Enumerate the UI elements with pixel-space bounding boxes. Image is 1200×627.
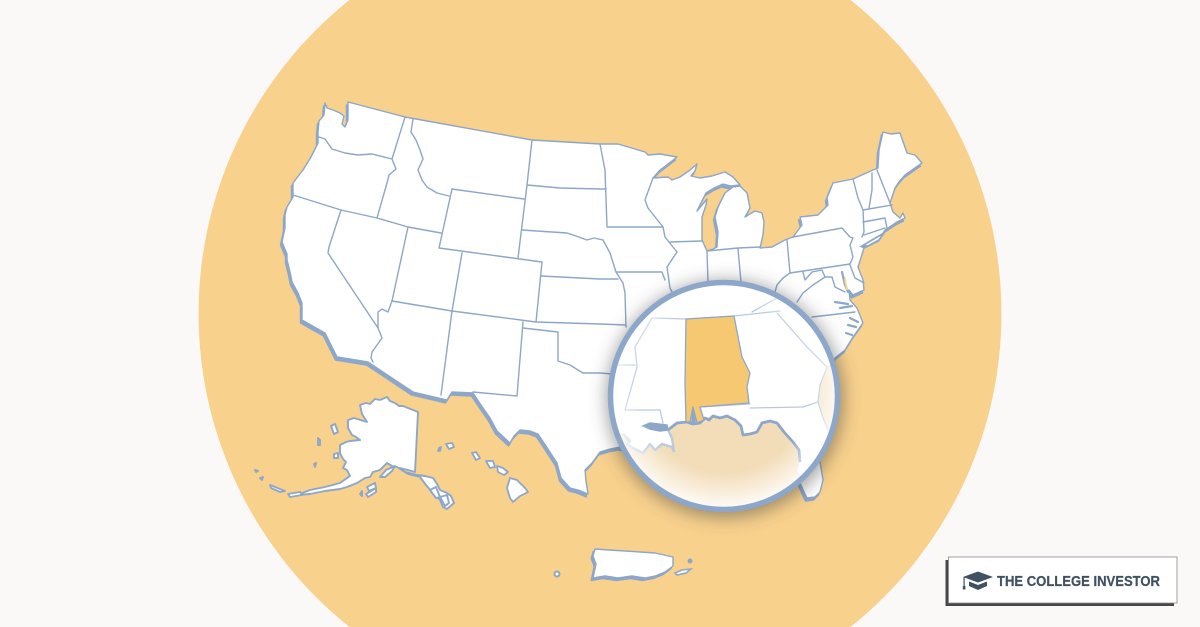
logo box shadow xyxy=(946,560,1174,606)
logo text: THE COLLEGE INVESTOR xyxy=(997,574,1160,590)
Mona Island xyxy=(554,572,560,576)
Alabama state xyxy=(685,316,750,423)
map: contiguous United States xyxy=(280,102,922,501)
Gulf of Mexico xyxy=(620,416,800,506)
gulf coast outline xyxy=(668,416,800,462)
Chesapeake Bay xyxy=(844,276,848,290)
Lake Pontchartrain xyxy=(643,423,668,431)
Puerto Rico xyxy=(554,549,692,580)
orange background circle xyxy=(199,0,1001,627)
lower 48 landmass xyxy=(282,102,922,498)
Hawaii xyxy=(438,443,528,502)
magnifier shadow xyxy=(607,281,843,517)
neighbouring state lines xyxy=(615,298,828,430)
magnifying lens: Alabama xyxy=(605,280,845,512)
Alaska xyxy=(255,397,454,509)
Long Island xyxy=(862,233,884,246)
state border lines xyxy=(293,117,892,396)
lens ring xyxy=(610,282,838,510)
Vieques and Culebra xyxy=(675,569,691,575)
logo box xyxy=(946,557,1177,606)
map shadow edge xyxy=(280,105,920,501)
logo box panel xyxy=(948,557,1177,603)
icon: graduation cap xyxy=(963,572,993,590)
lens edge fade xyxy=(612,284,836,508)
Atlantic xyxy=(818,365,835,432)
lens land xyxy=(613,285,830,476)
Mobile Bay xyxy=(691,406,696,423)
